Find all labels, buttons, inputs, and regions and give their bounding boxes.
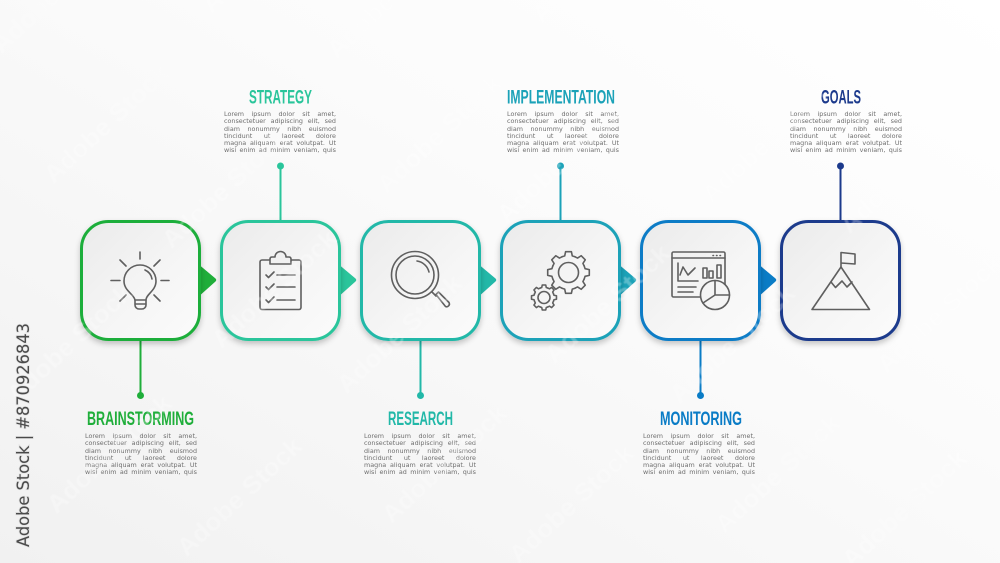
connector: strategy bbox=[277, 162, 284, 222]
text block: research: consectetuer adipiscing elit, sed bbox=[364, 439, 476, 447]
text block: implementation: tincidunt ut laoreet dolore bbox=[507, 132, 619, 140]
icon: light bulb bbox=[111, 252, 169, 309]
step 2: strategy bbox=[222, 86, 356, 340]
text block: brainstorming: magna aliquam erat volutpat. Ut bbox=[85, 461, 197, 469]
watermark pattern: Adobe Stock bbox=[664, 279, 801, 409]
text block: implementation: magna aliquam erat volutpat. Ut bbox=[507, 139, 619, 147]
arrow: implementation to monitoring bbox=[617, 263, 636, 298]
watermark pattern: Adobe Stock bbox=[38, 59, 175, 189]
step 3: research bbox=[362, 222, 496, 477]
step 4: implementation bbox=[502, 86, 636, 340]
watermark pattern: Adobe Stock bbox=[156, 124, 293, 254]
text block: monitoring: diam nonummy nibh euismod bbox=[643, 447, 755, 455]
text block: research bbox=[364, 433, 476, 477]
text block: implementation bbox=[507, 111, 619, 155]
heading: research: RESEARCH bbox=[388, 408, 453, 430]
arrow: brainstorming to strategy bbox=[197, 263, 216, 298]
text block: strategy: tincidunt ut laoreet dolore bbox=[224, 132, 336, 140]
arrow: research to implementation bbox=[477, 263, 496, 298]
stock id side label: Adobe Stock | #870926843 bbox=[14, 323, 34, 547]
connector: brainstorming bbox=[137, 340, 144, 399]
text block: goals: tincidunt ut laoreet dolore bbox=[790, 132, 902, 140]
heading: monitoring: MONITORING bbox=[660, 408, 742, 430]
text block: strategy: consectetuer adipiscing elit, sed bbox=[224, 117, 336, 125]
text block: goals bbox=[790, 111, 902, 155]
text block: goals: wisi enim ad minim veniam, quis bbox=[790, 146, 902, 154]
text block: strategy: diam nonummy nibh euismod bbox=[224, 125, 336, 133]
step 1: brainstorming bbox=[82, 222, 216, 477]
icon: mountain with flag bbox=[812, 252, 870, 310]
card: implementation bbox=[502, 222, 620, 340]
text block: monitoring: consectetuer adipiscing elit, sed bbox=[643, 439, 755, 447]
watermark pattern: Adobe Stock bbox=[41, 389, 178, 519]
text block: goals: magna aliquam erat volutpat. Ut bbox=[790, 139, 902, 147]
text block: goals: diam nonummy nibh euismod bbox=[790, 125, 902, 133]
connector: research bbox=[417, 340, 424, 399]
icon: analytics dashboard bbox=[672, 252, 730, 310]
heading: strategy: STRATEGY bbox=[249, 86, 312, 108]
card: goals bbox=[782, 222, 900, 340]
text block: goals: consectetuer adipiscing elit, sed bbox=[790, 117, 902, 125]
text block: implementation: wisi enim ad minim veniam, quis bbox=[507, 146, 619, 154]
text block: brainstorming: tincidunt ut laoreet dolore bbox=[85, 454, 197, 462]
watermark pattern: Adobe Stock bbox=[206, 224, 343, 354]
text block: monitoring: wisi enim ad minim veniam, quis bbox=[643, 468, 755, 476]
connector: implementation bbox=[557, 162, 564, 222]
connector: goals bbox=[837, 162, 844, 222]
card: strategy bbox=[222, 222, 340, 340]
heading: implementation: IMPLEMENTATION bbox=[507, 86, 615, 108]
text block: implementation: diam nonummy nibh euismod bbox=[507, 125, 619, 133]
watermark pattern: Adobe Stock bbox=[871, 249, 1000, 379]
watermark pattern: Adobe Stock bbox=[171, 432, 308, 562]
icon: clipboard checklist bbox=[260, 252, 301, 310]
text block: brainstorming: diam nonummy nibh euismod bbox=[85, 447, 197, 455]
text block: monitoring: tincidunt ut laoreet dolore bbox=[643, 454, 755, 462]
arrow: strategy to research bbox=[337, 263, 356, 298]
watermark pattern: Adobe Stock bbox=[331, 269, 468, 399]
card: research bbox=[362, 222, 480, 340]
watermark pattern: Adobe Stock bbox=[376, 399, 513, 529]
text block: brainstorming: consectetuer adipiscing elit, sed bbox=[85, 439, 197, 447]
watermark pattern: Adobe Stock bbox=[696, 79, 833, 209]
text block: brainstorming bbox=[85, 433, 197, 477]
heading: brainstorming: BRAINSTORMING bbox=[87, 408, 194, 430]
text block: implementation: consectetuer adipiscing elit, sed bbox=[507, 117, 619, 125]
watermark pattern: Adobe Stock bbox=[834, 109, 971, 239]
arrow: monitoring to goals bbox=[757, 263, 776, 298]
text block: monitoring: magna aliquam erat volutpat. Ut bbox=[643, 461, 755, 469]
text block: strategy bbox=[224, 111, 336, 155]
text block: strategy: wisi enim ad minim veniam, quis bbox=[224, 146, 336, 154]
card: monitoring bbox=[642, 222, 760, 340]
text block: strategy: magna aliquam erat volutpat. Ut bbox=[224, 139, 336, 147]
text block: monitoring bbox=[643, 433, 755, 477]
heading: goals: GOALS bbox=[821, 86, 861, 108]
card: brainstorming bbox=[82, 222, 200, 340]
text block: brainstorming: wisi enim ad minim veniam, quis bbox=[85, 468, 197, 476]
step 5: monitoring bbox=[642, 222, 776, 477]
watermark pattern: Adobe Stock bbox=[491, 99, 628, 229]
icon: gears bbox=[532, 252, 589, 310]
text block: research: diam nonummy nibh euismod bbox=[364, 447, 476, 455]
watermark pattern: Adobe Stock bbox=[1, 279, 138, 409]
text block: research: tincidunt ut laoreet dolore bbox=[364, 454, 476, 462]
watermark pattern: Adobe Stock bbox=[539, 239, 676, 369]
watermark pattern: Adobe Stock bbox=[371, 69, 508, 199]
text block: research: wisi enim ad minim veniam, quis bbox=[364, 468, 476, 476]
connector: monitoring bbox=[697, 340, 704, 399]
text block: research: magna aliquam erat volutpat. Ut bbox=[364, 461, 476, 469]
icon: magnifying glass bbox=[392, 252, 449, 307]
watermark pattern: Adobe Stock bbox=[709, 409, 846, 539]
step 6: goals bbox=[782, 86, 902, 340]
